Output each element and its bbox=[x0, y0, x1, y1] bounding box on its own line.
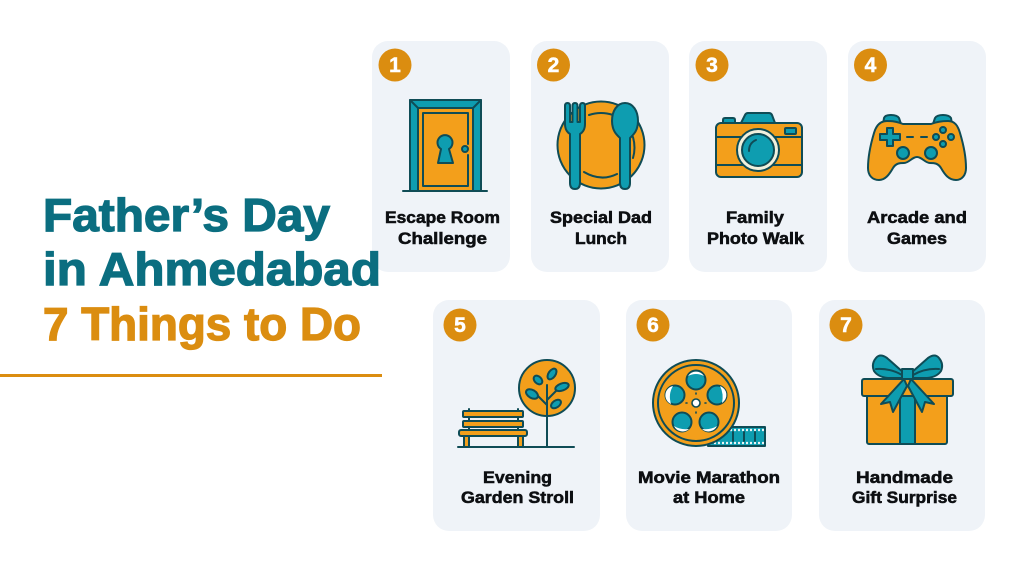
badge 6 bbox=[636, 308, 670, 342]
label: Evening Garden Stroll: Evening bbox=[483, 469, 552, 487]
title: Father’s Day bbox=[43, 189, 330, 241]
icon: bench and tree bbox=[458, 360, 575, 447]
label: Special Dad Lunch: Lunch bbox=[575, 230, 627, 248]
label: Family Photo Walk bbox=[707, 209, 805, 248]
icon: camera bbox=[716, 113, 802, 177]
badge 3 bbox=[696, 48, 728, 82]
label: Movie Marathon at Home: Movie Marathon bbox=[638, 469, 780, 487]
badge 2: 2 bbox=[548, 54, 559, 77]
badge 2 bbox=[537, 48, 570, 82]
panel: card 1 escape room bbox=[372, 41, 510, 272]
label: Escape Room Challenge bbox=[385, 209, 500, 248]
badge 7: 7 bbox=[840, 314, 852, 337]
label: Arcade and Games: Arcade and bbox=[867, 209, 967, 227]
title bbox=[43, 189, 381, 350]
label: Handmade Gift Surprise: Gift Surprise bbox=[852, 489, 957, 507]
label: Special Dad Lunch bbox=[550, 209, 652, 248]
label: Family Photo Walk: Family bbox=[726, 209, 785, 227]
label: Family Photo Walk: Photo Walk bbox=[707, 230, 805, 248]
label: Handmade Gift Surprise: Handmade bbox=[856, 469, 953, 487]
label: Movie Marathon at Home: at Home bbox=[673, 489, 745, 507]
badge 1 bbox=[378, 48, 412, 82]
label: Handmade Gift Surprise bbox=[852, 469, 957, 507]
label: Evening Garden Stroll: Garden Stroll bbox=[461, 489, 574, 507]
label: Movie Marathon at Home bbox=[638, 469, 780, 507]
panel: card 7 handmade gift surprise bbox=[819, 300, 985, 531]
badge 6: 6 bbox=[647, 314, 659, 337]
panel: card 3 family photo walk bbox=[689, 41, 827, 272]
icon: game controller bbox=[868, 115, 966, 180]
panel: card 2 special dad lunch bbox=[531, 41, 669, 272]
badge 5 bbox=[444, 308, 476, 342]
badge 5: 5 bbox=[454, 314, 466, 337]
label: Evening Garden Stroll bbox=[461, 469, 574, 507]
panel: card 4 arcade and games bbox=[848, 41, 986, 272]
icon: plate with fork and spoon bbox=[558, 102, 644, 189]
icon: film reel bbox=[653, 360, 765, 446]
icon: gift box bbox=[862, 356, 953, 444]
badge 1: 1 bbox=[389, 54, 401, 77]
title: 7 Things to Do bbox=[43, 298, 361, 350]
label: Escape Room Challenge: Escape Room bbox=[385, 209, 500, 227]
badge 7 bbox=[830, 308, 862, 342]
panel: card 5 evening garden stroll bbox=[433, 300, 600, 531]
title: in Ahmedabad bbox=[43, 243, 381, 295]
label: Arcade and Games bbox=[867, 209, 967, 248]
label: Arcade and Games: Games bbox=[887, 230, 947, 248]
label: Special Dad Lunch: Special Dad bbox=[550, 209, 652, 227]
label: Escape Room Challenge: Challenge bbox=[398, 230, 487, 248]
badge 4: 4 bbox=[865, 54, 877, 77]
panel: card 6 movie marathon at home bbox=[626, 300, 792, 531]
badge 3: 3 bbox=[706, 54, 718, 77]
badge 4 bbox=[854, 48, 887, 82]
icon: door with keyhole bbox=[403, 100, 487, 191]
